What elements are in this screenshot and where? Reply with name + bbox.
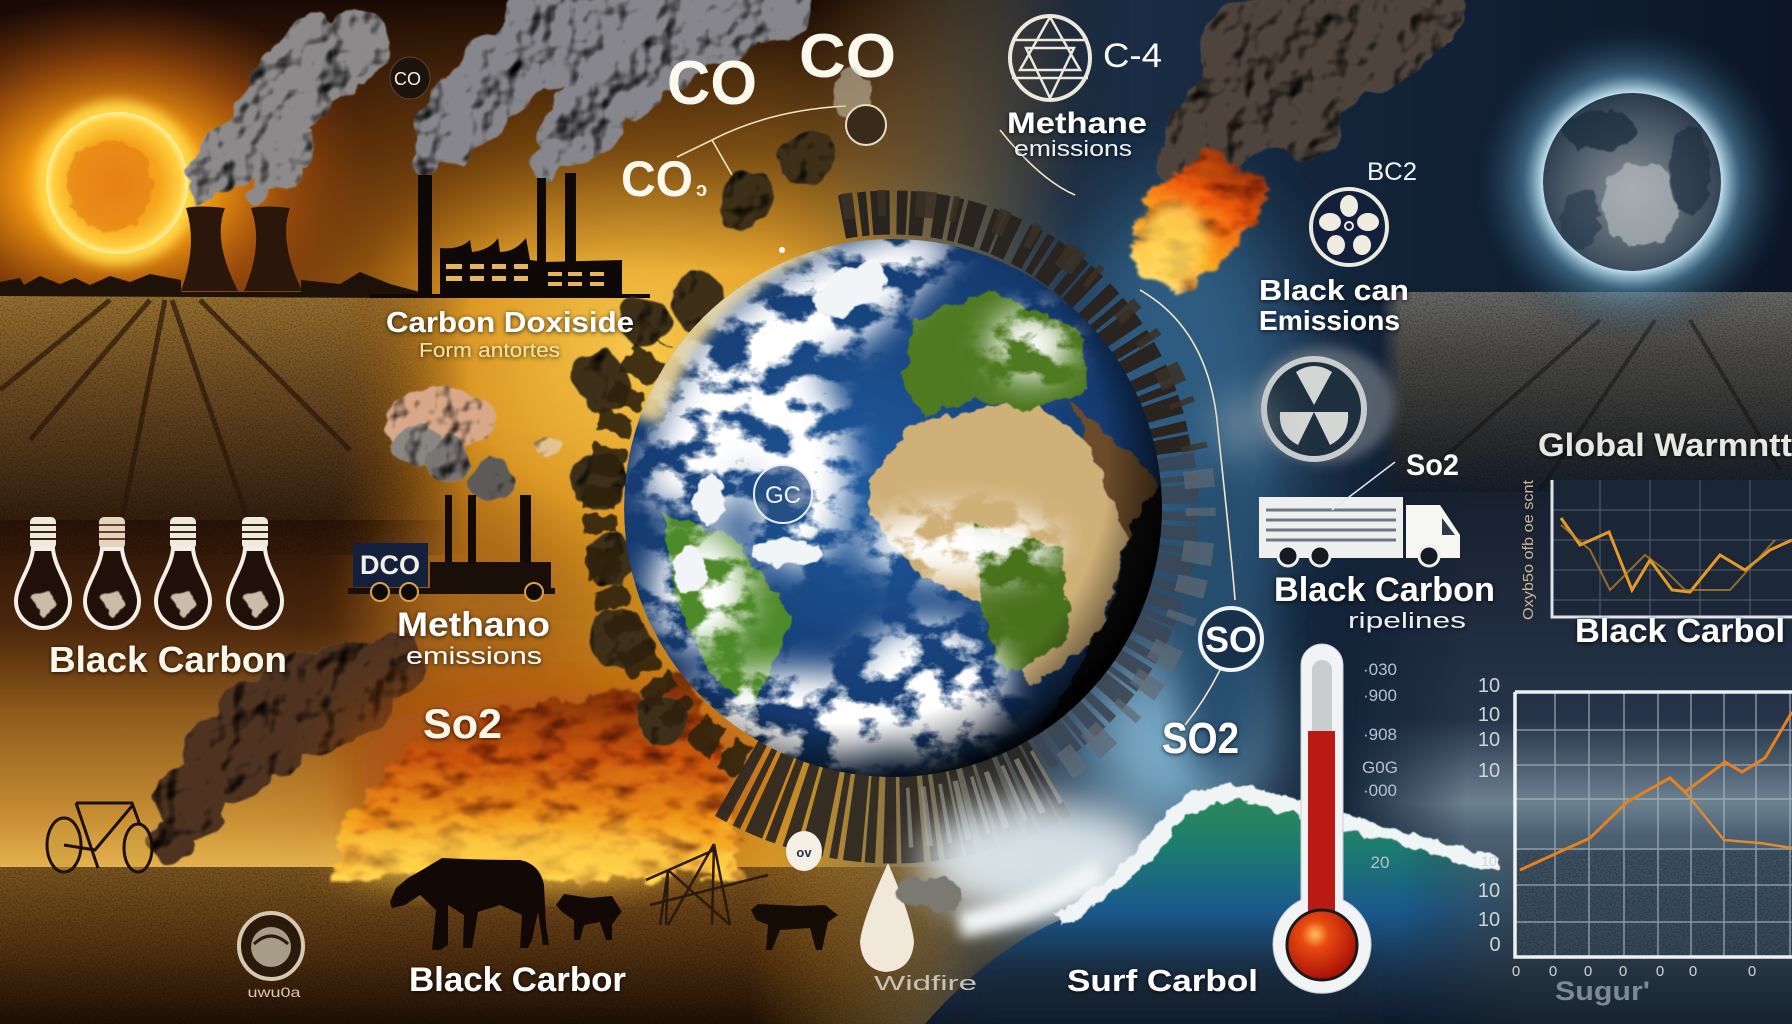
label: Methane emissions: emissions [1014, 136, 1132, 161]
thermometer scale: ·030 [1363, 660, 1397, 679]
Arabia desert shading [1070, 400, 1160, 640]
fan icon with cloud [1255, 347, 1395, 463]
labels: SO circle and SO2: SO [1205, 619, 1257, 660]
CO labels: CO [621, 151, 693, 207]
chart axis labels [1478, 675, 1756, 980]
crane tower [646, 844, 768, 925]
label: Carbon Dioxide: Carbon Doxiside [386, 307, 634, 339]
chart axis labels: 10 [1478, 880, 1500, 902]
thermometer scale: ·900 [1363, 686, 1397, 705]
ocean wave [920, 792, 1520, 1024]
chart axis labels: 0 [1748, 963, 1756, 980]
bulbs row [16, 517, 282, 628]
connector lines [677, 106, 1235, 725]
sun [35, 101, 199, 265]
so2 upper label and pointer [1332, 449, 1459, 510]
thermometer scale: G0G [1362, 758, 1398, 777]
label: Carbon Dioxide: Form antortes [419, 340, 560, 362]
truck [1259, 497, 1460, 566]
warm rim light [645, 232, 830, 420]
label: Methano emissions [397, 606, 550, 670]
label: Black Carbon left: Black Carbon [49, 639, 287, 680]
chart axis labels: 10 [1478, 760, 1500, 782]
thermometer scale [1362, 660, 1398, 872]
continent: Africa [869, 400, 1130, 686]
line chart lower over ocean [1515, 692, 1792, 957]
chart axis labels: 10 [1478, 704, 1500, 726]
thermometer scale: ·908 [1363, 725, 1397, 744]
label: Methano emissions: Methano [397, 606, 550, 644]
fan icon BC [1311, 189, 1387, 265]
trees and top left icon cluster [570, 67, 886, 744]
cow small [556, 894, 622, 940]
smoke plumes: factory stacks [412, 0, 810, 181]
chart axis labels: 10 [1478, 909, 1500, 931]
GC badge on Earth [754, 465, 812, 523]
CO labels [621, 22, 896, 207]
label: Black can Emissions: Black can [1259, 275, 1409, 307]
fireball smoke [1154, 0, 1464, 191]
labels: SO circle and SO2 [1162, 608, 1262, 763]
GC badge on Earth: GC [765, 482, 801, 509]
chart axis labels: 10 [1481, 853, 1497, 869]
chart axis labels: 0 [1549, 963, 1557, 980]
label: Black Carbon pipelines: ripelines [1348, 608, 1466, 633]
thermometer [1273, 644, 1371, 993]
line chart upper [1520, 479, 1792, 620]
CO labels: CO [799, 22, 896, 91]
horizon skyline left [0, 272, 420, 298]
round logo lower left [239, 913, 303, 1000]
label: Black Carbon bottom: Black Carbor [409, 961, 626, 999]
CO labels: ɔ [696, 179, 707, 201]
label: BC2: BC2 [1367, 158, 1417, 186]
chart axis labels: 10 [1478, 729, 1500, 751]
ocean [624, 239, 1162, 777]
wildfire flames [330, 670, 770, 880]
bicycle [47, 803, 152, 872]
balloon icon [786, 831, 822, 871]
line chart upper: Oxyb5o ofb oe scnt [1520, 479, 1537, 620]
label: CH4: C-4 [1103, 37, 1162, 75]
label: Methane emissions [1007, 107, 1147, 161]
cow large [390, 858, 549, 950]
small CO badge: CO [394, 69, 421, 89]
grey stones [896, 877, 962, 913]
continent: Europe [903, 291, 1090, 417]
chart axis labels: 0 [1512, 963, 1520, 980]
chart axis labels: 0 [1489, 934, 1501, 956]
methane globe icon [1010, 16, 1090, 100]
thermometer scale: ·000 [1363, 781, 1397, 800]
CO labels: CO [667, 49, 757, 118]
smoke plume: towers [184, 7, 393, 208]
chart axis labels: 0 [1656, 963, 1664, 980]
round logo lower left: uwu0a [248, 984, 301, 1000]
factory with chimneys [370, 173, 650, 298]
central Africa vegetation [972, 526, 1069, 674]
cow third [751, 904, 838, 950]
label: So2 left: So2 [423, 700, 502, 747]
small CO badge [390, 57, 430, 99]
cooling towers [181, 206, 302, 291]
solid cloud patches [672, 253, 895, 592]
pale cloud and smoke above stack [386, 388, 556, 500]
label: Black can Emissions: Emissions [1259, 305, 1400, 336]
city smoke near right [1215, 395, 1275, 455]
labels: SO circle and SO2: SO2 [1162, 714, 1239, 763]
label: Carbon Dioxide [386, 307, 634, 362]
city and tree ring around Earth [600, 203, 1201, 818]
label: Black Carbol right: Black Carbol [1575, 612, 1785, 649]
dark terminator [1034, 484, 1162, 737]
label: Methane emissions: Methane [1007, 107, 1147, 140]
label: Black Carbon pipelines [1274, 571, 1495, 633]
chart axis labels: 0 [1689, 963, 1697, 980]
label: Surf Carbol: Surf Carbol [1067, 963, 1258, 998]
label: Black can Emissions [1259, 275, 1409, 336]
chart axis labels: 0 [1584, 963, 1592, 980]
wildfire smoke [152, 636, 427, 865]
continent: South America [663, 514, 794, 709]
fireball [1132, 150, 1272, 290]
DCO truck with stacks: DCO [360, 550, 420, 580]
thermometer scale: 20 [1371, 853, 1389, 872]
water drop icon [860, 863, 914, 972]
moon / cooled planet [1487, 36, 1779, 328]
label: Widfire: Widfire [874, 973, 977, 995]
clouds textured [640, 230, 1070, 770]
so2 upper label and pointer: So2 [1406, 449, 1459, 482]
Earth globe [624, 230, 1180, 800]
label: Black Carbon pipelines: Black Carbon [1274, 571, 1495, 609]
DCO truck with stacks [348, 495, 555, 601]
label: Methano emissions: emissions [406, 643, 542, 670]
chart axis labels: 0 [1619, 963, 1627, 980]
label: Global Warming: Global Warmntt [1538, 427, 1792, 463]
label: Sugur: Sugur' [1555, 976, 1650, 1006]
chart axis labels: 10 [1478, 675, 1500, 697]
balloon icon: ov [796, 845, 812, 860]
